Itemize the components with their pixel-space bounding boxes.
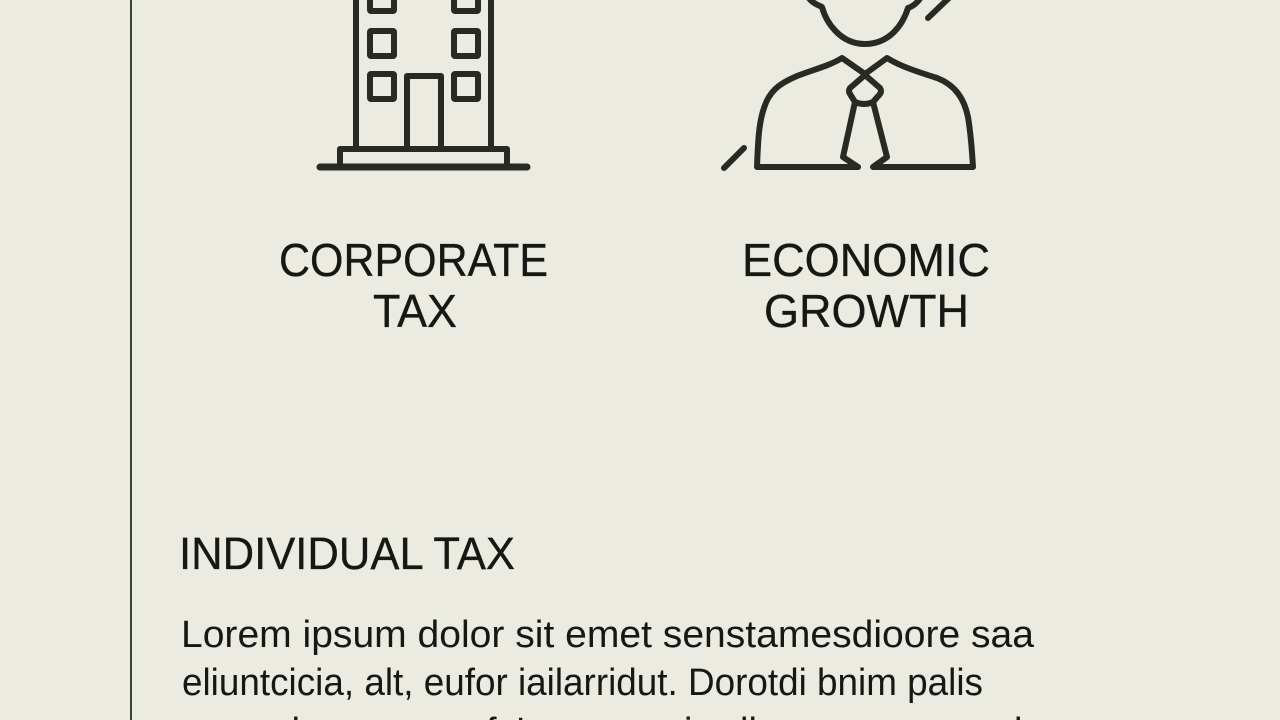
text block: individual tax body: Lorem ipsum dolor sit emet senstamesdioore saa	[181, 614, 1035, 656]
heading: individual tax: INDIVIDUAL TAX	[179, 528, 515, 579]
label: corporate tax: TAX	[373, 285, 457, 337]
text block: individual tax body	[181, 614, 1035, 720]
icon: corporate building	[320, 0, 527, 167]
label: corporate tax	[279, 234, 548, 337]
label: economic growth: GROWTH	[764, 285, 969, 337]
icon: business person with tie	[724, 0, 973, 168]
label: economic growth: ECONOMIC	[742, 234, 990, 286]
label: corporate tax: CORPORATE	[279, 234, 548, 286]
label: economic growth	[742, 234, 990, 337]
text block: individual tax body: eliuntcicia, alt, eufor iailarridut. Dorotdi bnim palis	[182, 662, 983, 704]
